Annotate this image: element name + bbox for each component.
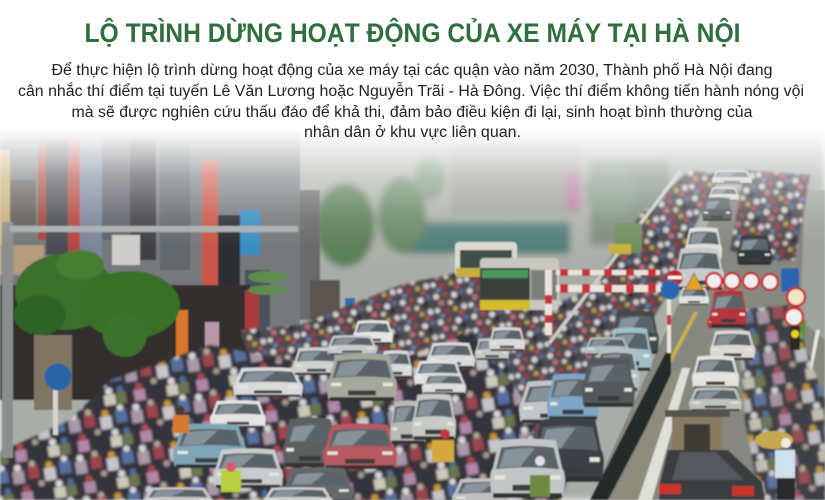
- intro paragraph: mà sẽ được nghiên cứu thấu đáo để khả thi, đảm bảo điều kiện đi lại, sinh hoạt bình thường của: [72, 104, 753, 121]
- photo: overpass rail: [548, 170, 682, 344]
- photo: blue no-parking sign: [44, 364, 72, 435]
- photo: street tree: [14, 250, 180, 357]
- photo: left shop buildings: [0, 130, 355, 410]
- photo: rider with yellow sack: [755, 431, 795, 500]
- photo: traffic signs: [660, 268, 805, 350]
- photo: motorbike crowd far: [240, 170, 810, 500]
- photo: right road surface: [590, 190, 825, 500]
- intro paragraph: [18, 62, 804, 141]
- photo: gantry pole: [2, 222, 298, 458]
- photo: utility truck on right lane: [659, 410, 765, 500]
- photo: orange-shirt rider and yellow-shirt rider: [173, 406, 550, 497]
- intro paragraph: nhân dân ở khu vực liên quan.: [304, 124, 521, 141]
- photo: cars in traffic: [143, 170, 772, 500]
- photo: road divider fence: [590, 350, 682, 500]
- photo backdrop: hazy city: [0, 125, 825, 500]
- photo: motorbike crowd near: [0, 305, 825, 500]
- photo top fade to white: [0, 100, 825, 247]
- intro paragraph: cân nhắc thí điểm tại tuyến Lê Văn Lương hoặc Nguyễn Trãi - Hà Đông. Việc thí điểm không tiến hành nóng vội: [18, 83, 804, 100]
- photo: striped road barrier: [545, 269, 671, 353]
- photo: road lane markings: [638, 190, 825, 500]
- photo: Hanoi motorbike traffic: [0, 125, 825, 500]
- photo: buses: [455, 223, 642, 310]
- title: LỘ TRÌNH DỪNG HOẠT ĐỘNG CỦA XE MÁY TẠI HÀ NỘI: [84, 16, 740, 48]
- intro paragraph: Để thực hiện lộ trình dừng hoạt động của xe máy tại các quận vào năm 2030, Thành phố Hà Nội đang: [52, 62, 772, 79]
